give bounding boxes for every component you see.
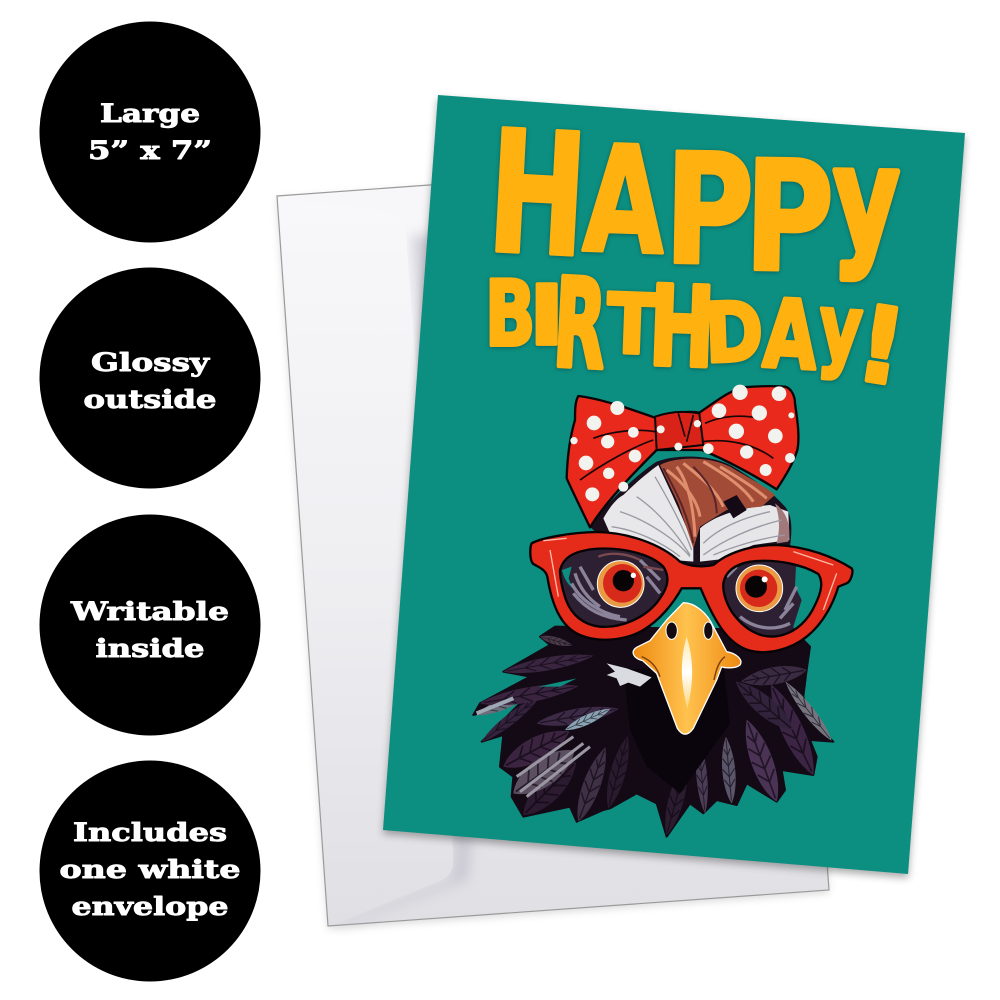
badge: Includes one white envelope: one white bbox=[60, 855, 240, 884]
heading: Happy Birthday!: P bbox=[743, 129, 835, 307]
white envelope bbox=[277, 160, 829, 929]
badge: Includes one white envelope bbox=[40, 760, 260, 982]
red glasses bbox=[530, 532, 852, 652]
head bbox=[590, 456, 791, 573]
heading: Happy Birthday!: P bbox=[663, 122, 755, 300]
heading: Happy Birthday!: D bbox=[703, 284, 765, 381]
badge: Writable inside: inside bbox=[96, 634, 204, 663]
badge: Writable inside bbox=[40, 514, 260, 736]
badge: Glossy outside bbox=[40, 268, 260, 488]
heading: Happy Birthday!: y bbox=[815, 273, 866, 383]
badge: Glossy outside: outside bbox=[84, 385, 216, 414]
heading: Happy Birthday!: A bbox=[761, 279, 820, 392]
envelope flap bbox=[279, 198, 453, 925]
badge: Glossy outside: Glossy bbox=[91, 348, 211, 377]
badge: Includes one white envelope: envelope bbox=[72, 892, 228, 921]
badge: Large 5 x 7 bbox=[40, 22, 260, 242]
heading: Happy Birthday!: ! bbox=[849, 283, 913, 410]
right lens and eye bbox=[723, 561, 821, 637]
heading: Happy Birthday!: T bbox=[605, 278, 659, 374]
heading: Happy Birthday!: H bbox=[647, 263, 717, 393]
badge: Large 5 x 7: Large bbox=[100, 99, 200, 128]
red polka dot bow bbox=[567, 385, 798, 527]
heading: Happy Birthday!: I bbox=[529, 268, 564, 363]
heading: Happy Birthday!: A bbox=[581, 114, 668, 288]
heading: Happy Birthday!: H bbox=[484, 95, 591, 296]
badge: Includes one white envelope: Includes bbox=[73, 818, 227, 847]
glasses frame bbox=[530, 532, 852, 652]
heading: Happy Birthday!: B bbox=[485, 262, 535, 367]
left lens and eye bbox=[560, 549, 667, 627]
heading: Happy Birthday!: R bbox=[550, 254, 609, 397]
greeting card bbox=[383, 95, 965, 878]
illustration: chicken with bow and glasses bbox=[473, 385, 852, 837]
heading: Happy Birthday! bbox=[484, 95, 913, 410]
beak bbox=[633, 603, 741, 734]
heading: Happy Birthday!: y bbox=[831, 117, 901, 284]
badge: Large 5 x 7: 5” x 7” bbox=[88, 136, 212, 165]
badge: Writable inside: Writable bbox=[70, 597, 229, 626]
neck feathers bbox=[473, 627, 836, 837]
